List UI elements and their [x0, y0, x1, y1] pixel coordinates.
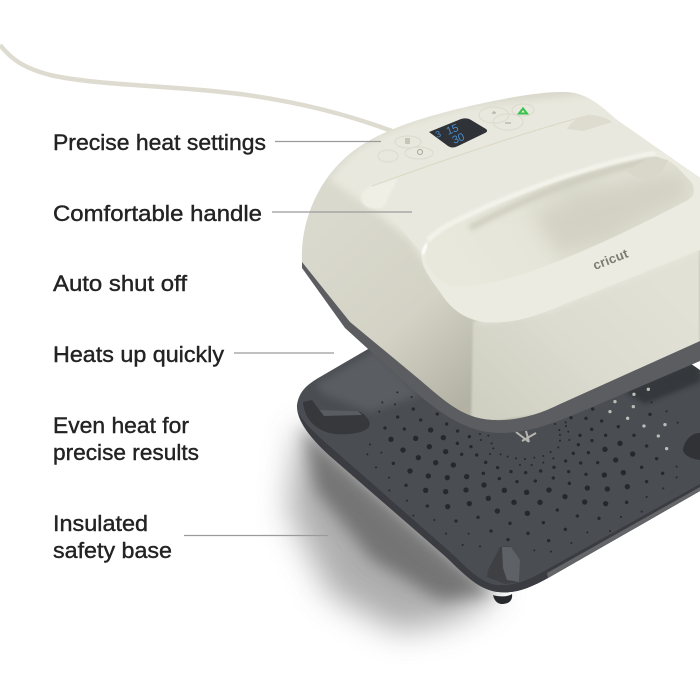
power cord	[0, 45, 400, 134]
recess inner shading	[470, 158, 690, 255]
label: heat settings: Precise heat settings	[53, 130, 266, 155]
display seconds: 30	[451, 131, 466, 147]
line: safety base	[184, 534, 328, 536]
panel buttons	[378, 104, 534, 162]
vent holes: lit	[610, 389, 667, 449]
label: safety base: Insulated	[53, 511, 148, 536]
shadow under press	[627, 364, 700, 404]
line: heats up	[234, 352, 334, 354]
base heat symbol	[516, 431, 536, 442]
label: safety base	[53, 511, 172, 563]
label: even heat	[53, 413, 199, 465]
handle left pocket	[361, 178, 398, 209]
button icons	[405, 111, 511, 154]
top surface	[332, 94, 688, 259]
start button	[519, 108, 527, 114]
display temperature: 15	[445, 122, 460, 138]
base front right highlight	[547, 487, 700, 578]
press body	[302, 90, 700, 424]
body shell	[302, 92, 700, 420]
press skirt	[302, 256, 700, 433]
label: shut off: Auto shut off	[53, 271, 188, 296]
insulated safety base	[297, 345, 700, 604]
brand: cricut	[591, 246, 631, 273]
label: safety base: safety base	[53, 538, 172, 563]
base front edge	[298, 412, 700, 592]
front face	[471, 240, 700, 424]
handle rim	[421, 149, 700, 322]
vent holes: medium	[385, 409, 663, 541]
foot: bottom	[487, 546, 520, 584]
base shadow	[288, 425, 500, 632]
leader lines	[184, 142, 412, 536]
handle upper rim light	[428, 153, 655, 240]
label: even heat: precise results	[53, 440, 199, 465]
handle seam	[372, 115, 590, 186]
rim highlight	[423, 245, 426, 253]
line: heat settings	[275, 140, 381, 142]
foot: top left	[303, 400, 370, 434]
handle recess	[425, 156, 694, 286]
display time: 3	[434, 129, 442, 140]
foot: right	[683, 433, 700, 460]
line: handle	[272, 211, 412, 213]
base upper left sheen	[318, 352, 416, 411]
handle slot	[567, 115, 612, 131]
bottom peg	[493, 594, 512, 604]
base plate	[297, 345, 700, 592]
control panel	[378, 104, 534, 162]
handle band	[362, 121, 660, 252]
vent holes: small	[367, 392, 678, 552]
display	[429, 118, 487, 148]
label: even heat: Even heat for	[53, 413, 189, 438]
feature labels	[53, 130, 266, 563]
label: handle: Comfortable handle	[53, 201, 262, 226]
recess finger notch	[627, 157, 668, 179]
label: heats up: Heats up quickly	[53, 342, 224, 367]
vent holes: large	[391, 430, 633, 513]
